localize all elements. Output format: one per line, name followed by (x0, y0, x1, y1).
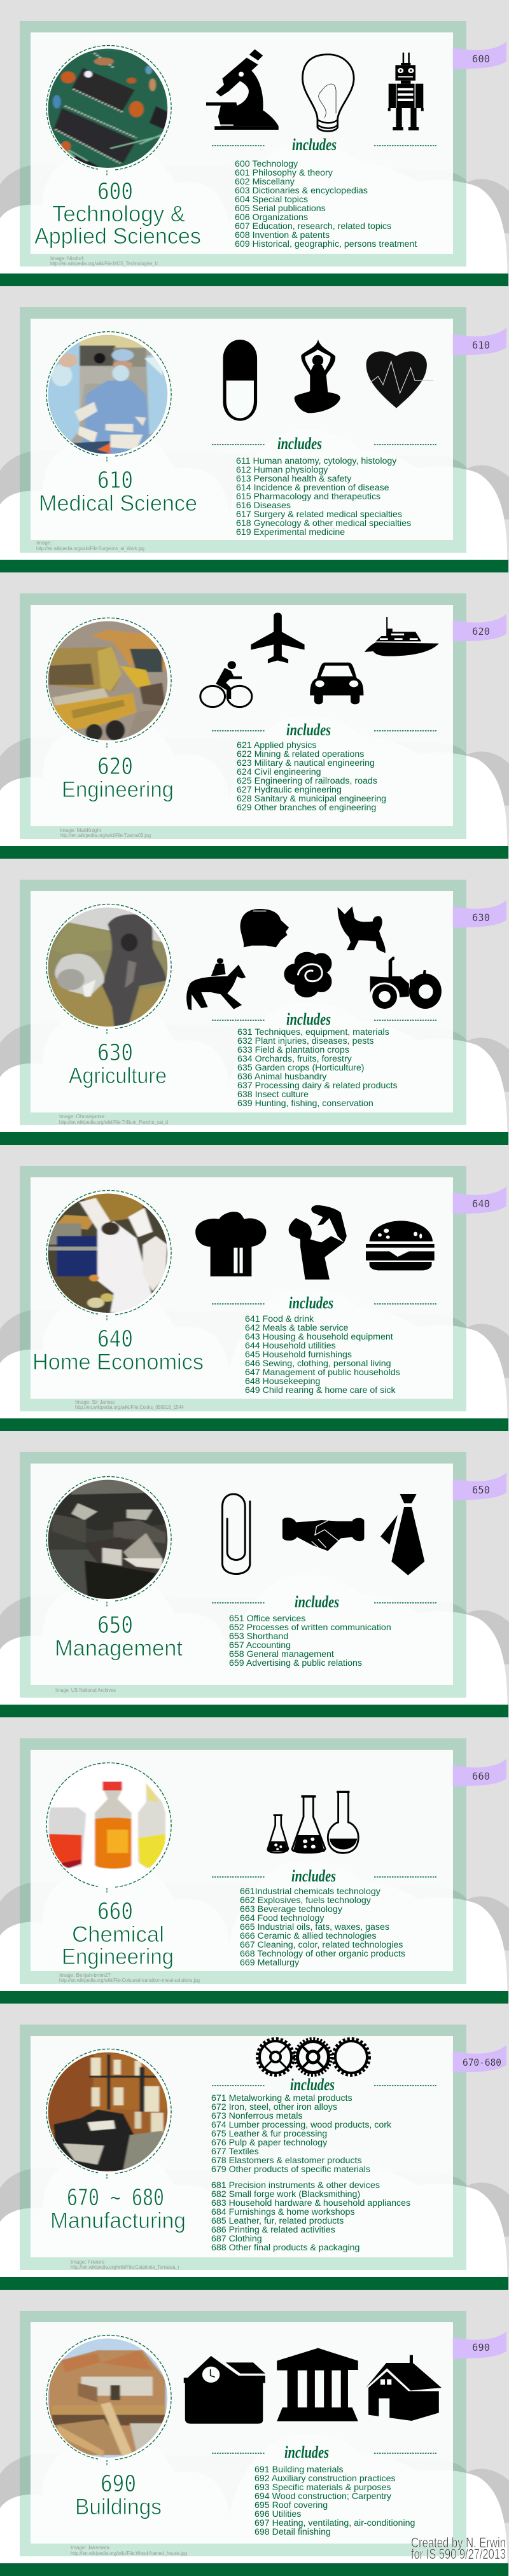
list: 697 Heating, ventilating, air-conditioning (254, 2518, 415, 2528)
list: 680s: 688 Other final products & packaging (211, 2243, 359, 2253)
section: 690 Buildings (0, 2290, 509, 2576)
list: 670s: 674 Lumber processing, wood products, cork (211, 2120, 392, 2130)
image credit (71, 2545, 187, 2556)
list: 634 Orchards, fruits, forestry (237, 1054, 352, 1064)
list: 606 Organizations (235, 212, 308, 223)
list: 645 Household furnishings (245, 1350, 352, 1360)
list: 600 Technology (235, 159, 298, 169)
list: 646 Sewing, clothing, personal living (245, 1359, 391, 1369)
image credit (75, 1399, 185, 1410)
image credit: Image: Nixdorf. (50, 256, 85, 261)
list (240, 1887, 405, 1968)
image credit: Image: Benjah-bmm27 (59, 1972, 111, 1978)
list: 653 Shorthand (229, 1631, 288, 1642)
title (55, 1612, 183, 1661)
icons: pig, dog, horse, rose, tractor (186, 906, 442, 1010)
includes heading: includes (284, 2443, 329, 2462)
list: 663 Beverage technology (240, 1904, 343, 1915)
icon: yoga pose (295, 339, 340, 413)
photo: surgeons (48, 335, 168, 454)
title: 610 (97, 467, 133, 494)
list: 692 Auxiliary construction practices (254, 2474, 396, 2484)
list: 696 Utilities (254, 2509, 301, 2519)
list: 616 Diseases (236, 501, 291, 511)
icon: house (366, 2355, 442, 2421)
title: Applied Sciences (34, 224, 201, 249)
list: 605 Serial publications (235, 204, 326, 214)
title: Home Economics (32, 1350, 204, 1375)
icon: piggy bank (241, 909, 289, 947)
title: Agriculture (69, 1063, 167, 1088)
list: 680s: 683 Household hardware & household appliances (211, 2198, 410, 2208)
image credit (59, 1972, 200, 1983)
list: 642 Meals & table service (245, 1323, 349, 1333)
title: Chemical (72, 1922, 164, 1947)
title (39, 467, 197, 516)
photo: circuit board (48, 48, 168, 168)
list: 611 Human anatomy, cytology, histology (236, 456, 397, 466)
list: 618 Gynecology & other medical specialties (236, 518, 411, 529)
image credit: http://en.wikipedia.org/wiki/File:Wood-framed_house.jpg (71, 2551, 187, 2556)
list: 693 Specific materials & purposes (254, 2483, 391, 2493)
list: 625 Engineering of railroads, roads (237, 776, 377, 786)
icon: capsule (223, 340, 257, 421)
list: 670s: 672 Iron, steel, other iron alloys (211, 2102, 337, 2112)
icon: car (310, 663, 363, 704)
list: 629 Other branches of engineering (237, 803, 376, 813)
list: 614 Incidence & prevention of disease (236, 483, 389, 493)
title: 600 (97, 179, 133, 205)
tab label: 670-680 (463, 2056, 501, 2068)
list (229, 1614, 391, 1668)
conical flask (292, 1795, 325, 1853)
gear 3 (333, 2039, 369, 2075)
list (237, 1027, 398, 1109)
list: 649 Child rearing & home care of sick (245, 1385, 396, 1395)
list: 680s (211, 2180, 410, 2253)
list: 667 Cleaning, color, related technologies (240, 1940, 403, 1950)
list: 608 Invention & patents (235, 230, 330, 240)
section: 620 Engineering (0, 572, 509, 859)
title: 660 (97, 1899, 133, 1925)
title (50, 2185, 186, 2233)
image credit (36, 540, 144, 551)
photo: textile machine (48, 2052, 168, 2171)
icon: yacht (365, 617, 439, 656)
tab label: 630 (472, 911, 490, 924)
list: 691 Building materials (254, 2465, 344, 2475)
image credit: Image: (36, 540, 52, 546)
list (245, 1314, 400, 1395)
list: 666 Ceramic & allied technologies (240, 1931, 377, 1941)
list: 698 Detail finishing (254, 2527, 331, 2537)
list: 609 Historical, geographic, persons treatment (235, 239, 417, 249)
image credit: http://en.wikipedia.org/wiki/File:Catalonia_Terrassa_r (71, 2264, 179, 2270)
image credit: Image: Friviere (71, 2259, 105, 2265)
list: 694 Wood construction; Carpentry (254, 2491, 392, 2502)
photo: vintage office (48, 1479, 168, 1599)
list: 635 Garden crops (Horticulture) (237, 1063, 364, 1073)
title (62, 1899, 174, 1969)
list: 680s: 684 Furnishings & home workshops (211, 2207, 355, 2217)
image credit: http://en.wikipedia.org/wiki/File:Trillium_Pancho_cat_d (59, 1119, 168, 1125)
photo: dog and cat (48, 907, 168, 1027)
icons: plane, boat, bicycle, car (200, 613, 439, 707)
icon: dog (338, 906, 386, 953)
title (62, 754, 174, 802)
image credit: http://en.wikipedia.org/wiki/File:Surgeons_at_Work.jpg (36, 546, 144, 551)
list: 670s: 677 Textiles (211, 2147, 259, 2157)
list: 617 Surgery & related medical specialties (236, 509, 402, 520)
includes heading: includes (292, 135, 337, 154)
includes heading: includes (286, 1010, 331, 1028)
list: 680s: 681 Precision instruments & other devices (211, 2180, 380, 2191)
title (75, 2471, 162, 2519)
icon: cyclist (200, 661, 252, 707)
list: 668 Technology of other organic products (240, 1949, 405, 1959)
list: 670s: 678 Elastomers & elastomer products (211, 2156, 362, 2166)
icon: paperclip (222, 1494, 250, 1574)
gear 2 (295, 2039, 331, 2075)
tab label: 620 (472, 625, 490, 637)
icon: rose (284, 952, 331, 997)
list (235, 159, 417, 249)
tab label: 640 (472, 1198, 490, 1210)
section: 670-680 Manufacturing (0, 2004, 509, 2290)
image credit (59, 1114, 168, 1125)
title: Manufacturing (50, 2208, 186, 2233)
title: Management (55, 1636, 183, 1661)
list: 607 Education, research, related topics (235, 221, 391, 232)
list: 601 Philosophy & theory (235, 168, 333, 178)
image credit: Image: Ohnaisjamie (59, 1114, 105, 1119)
list: 652 Processes of written communication (229, 1623, 391, 1633)
title: 650 (97, 1612, 133, 1638)
photo: excavators (48, 621, 168, 740)
list: 632 Plant injuries, diseases, pests (237, 1036, 374, 1046)
icon: flasks (268, 1791, 358, 1853)
list: 669 Metallurgy (240, 1958, 300, 1968)
tab label: 600 (472, 53, 490, 65)
image credit (71, 2259, 179, 2270)
list: 619 Experimental medicine (236, 527, 345, 537)
image credit: Image: MattKnight (60, 828, 102, 833)
icon: light bulb (303, 55, 354, 131)
list: 604 Special topics (235, 195, 308, 205)
icons: paperclip, handshake, tie (222, 1494, 424, 1575)
tab label: 660 (472, 1770, 490, 1782)
title: Buildings (75, 2495, 162, 2519)
section: 650 Management (0, 1431, 509, 1717)
list: 670s: 675 Leather & fur processing (211, 2129, 327, 2139)
list: 680s: 685 Leather, fur, related products (211, 2216, 344, 2226)
list: 680s: 682 Small forge work (Blacksmithing) (211, 2189, 360, 2199)
title: 630 (97, 1040, 133, 1066)
section: 600 Technology & Applied Sciences (0, 0, 509, 286)
image credit: http://en.wikipedia.org/wiki/File:Cooks_050918_1544 (75, 1404, 185, 1410)
list: 641 Food & drink (245, 1314, 314, 1324)
section: 630 Agriculture (0, 859, 509, 1145)
icon: horse and rider (186, 958, 246, 1010)
title: 620 (97, 754, 133, 780)
includes heading: includes (290, 2075, 335, 2094)
list: 670s: 671 Metalworking & metal products (211, 2093, 352, 2103)
gear 1 (257, 2039, 294, 2075)
image credit: http://en.wikipedia.org/wiki/File:Coloured-transition-metal-solutions.jpg (59, 1977, 200, 1983)
section: 640 Home Economics (0, 1145, 509, 1431)
list: 638 Insect culture (237, 1090, 309, 1100)
section: 660 Chemical Engineering (0, 1717, 509, 2004)
list: 622 Mining & related operations (237, 749, 364, 759)
round flask (328, 1791, 358, 1853)
list: 613 Personal health & safety (236, 474, 352, 484)
includes heading: includes (286, 721, 331, 739)
title (69, 1040, 167, 1088)
list: 602 Miscellany (235, 177, 295, 187)
image credit (50, 256, 158, 267)
icon: handshake (282, 1518, 364, 1551)
image credit: Image: US National Archives (55, 1687, 116, 1693)
photo: wood-framed house (48, 2338, 168, 2458)
photo: chefs in a kitchen (48, 1193, 168, 1313)
icon: chef hat (195, 1212, 266, 1277)
list: 648 Housekeeping (245, 1376, 320, 1387)
image credit (60, 828, 151, 838)
creator credit (411, 2535, 506, 2562)
small flask (268, 1814, 288, 1853)
icon: burger (366, 1221, 435, 1270)
list: 670s: 673 Nonferrous metals (211, 2111, 303, 2121)
list: 627 Hydraulic engineering (237, 785, 342, 795)
title (34, 179, 201, 249)
tab label: 690 (472, 2341, 490, 2353)
icon: robot (388, 53, 424, 130)
includes heading: includes (291, 1867, 336, 1885)
title: 690 (101, 2471, 136, 2497)
image credit: Image: Jaksmata (71, 2545, 109, 2551)
icon: parent lifting baby (289, 1205, 347, 1280)
list: 659 Advertising & public relations (229, 1658, 362, 1668)
list (254, 2465, 415, 2537)
list: 680s: 686 Printing & related activities (211, 2225, 335, 2235)
list: 680s: 687 Clothing (211, 2234, 262, 2244)
list: 670s (211, 2093, 392, 2175)
list: 670s: 679 Other products of specific materials (211, 2164, 370, 2175)
list (237, 740, 386, 813)
icon: microscope (206, 49, 279, 130)
icons: clock house, temple, house (184, 2348, 442, 2424)
title: Medical Science (39, 491, 197, 516)
list (236, 456, 411, 537)
icon: airplane (251, 613, 305, 663)
list: 639 Hunting, fishing, conservation (237, 1098, 373, 1109)
list: 644 Household utilities (245, 1341, 336, 1351)
list: 612 Human physiology (236, 465, 328, 475)
title: 670 ~ 680 (67, 2185, 164, 2211)
icons: pill, yoga, heart (223, 339, 433, 421)
icon: three gears (257, 2039, 369, 2075)
title: 640 (97, 1326, 133, 1352)
section: 610 Medical Science (0, 286, 509, 572)
list: 633 Field & plantation crops (237, 1045, 349, 1055)
icon: necktie (380, 1494, 424, 1575)
image credit: http://en.wikipedia.org/wiki/File:Tzama02.jpg (60, 833, 151, 838)
image credit: http://en.wikipedia.org/wiki/File:MOS_Technologies_Ic (50, 261, 158, 267)
list: 636 Animal husbandry (237, 1072, 327, 1082)
list: 670s: 676 Pulp & paper technology (211, 2138, 328, 2148)
title (32, 1326, 204, 1375)
list: 662 Explosives, fuels technology (240, 1895, 372, 1906)
list: 651 Office services (229, 1614, 305, 1624)
title: Engineering (62, 1944, 174, 1969)
tab label: 650 (472, 1484, 490, 1496)
tab label: 610 (472, 339, 490, 351)
list: 628 Sanitary & municipal engineering (237, 794, 386, 804)
list: 657 Accounting (229, 1640, 291, 1651)
includes heading: includes (277, 434, 322, 453)
icon: temple (277, 2348, 358, 2421)
icon: tractor (370, 957, 442, 1009)
image credit: Image: Sir James (75, 1399, 115, 1405)
title: Technology & (52, 202, 185, 226)
includes heading: includes (289, 1294, 333, 1312)
list: 631 Techniques, equipment, materials (237, 1027, 389, 1037)
list: 643 Housing & household equipment (245, 1332, 393, 1342)
list: 695 Roof covering (254, 2500, 328, 2510)
list: 665 Industrial oils, fats, waxes, gases (240, 1922, 389, 1932)
list: 647 Management of public households (245, 1368, 400, 1378)
icon: heart with ECG (366, 351, 433, 408)
title: Engineering (62, 777, 174, 802)
icons: chef hat, father and baby, burger (195, 1205, 435, 1280)
list: 615 Pharmacology and therapeutics (236, 492, 380, 502)
list: 621 Applied physics (237, 740, 316, 751)
icons: microscope, light bulb, robot (206, 49, 424, 131)
list: 624 Civil engineering (237, 767, 321, 777)
list: 661Industrial chemicals technology (240, 1887, 381, 1897)
list: 603 Dictionaries & encyclopedias (235, 186, 368, 196)
list: 664 Food technology (240, 1913, 324, 1923)
list: 623 Military & nautical engineering (237, 758, 375, 768)
list: 658 General management (229, 1649, 334, 1659)
includes heading: includes (295, 1593, 339, 1611)
icon: clock tower building (184, 2356, 265, 2424)
list: 637 Processing dairy & related products (237, 1081, 398, 1091)
photo: coloured solutions (48, 1781, 167, 1869)
